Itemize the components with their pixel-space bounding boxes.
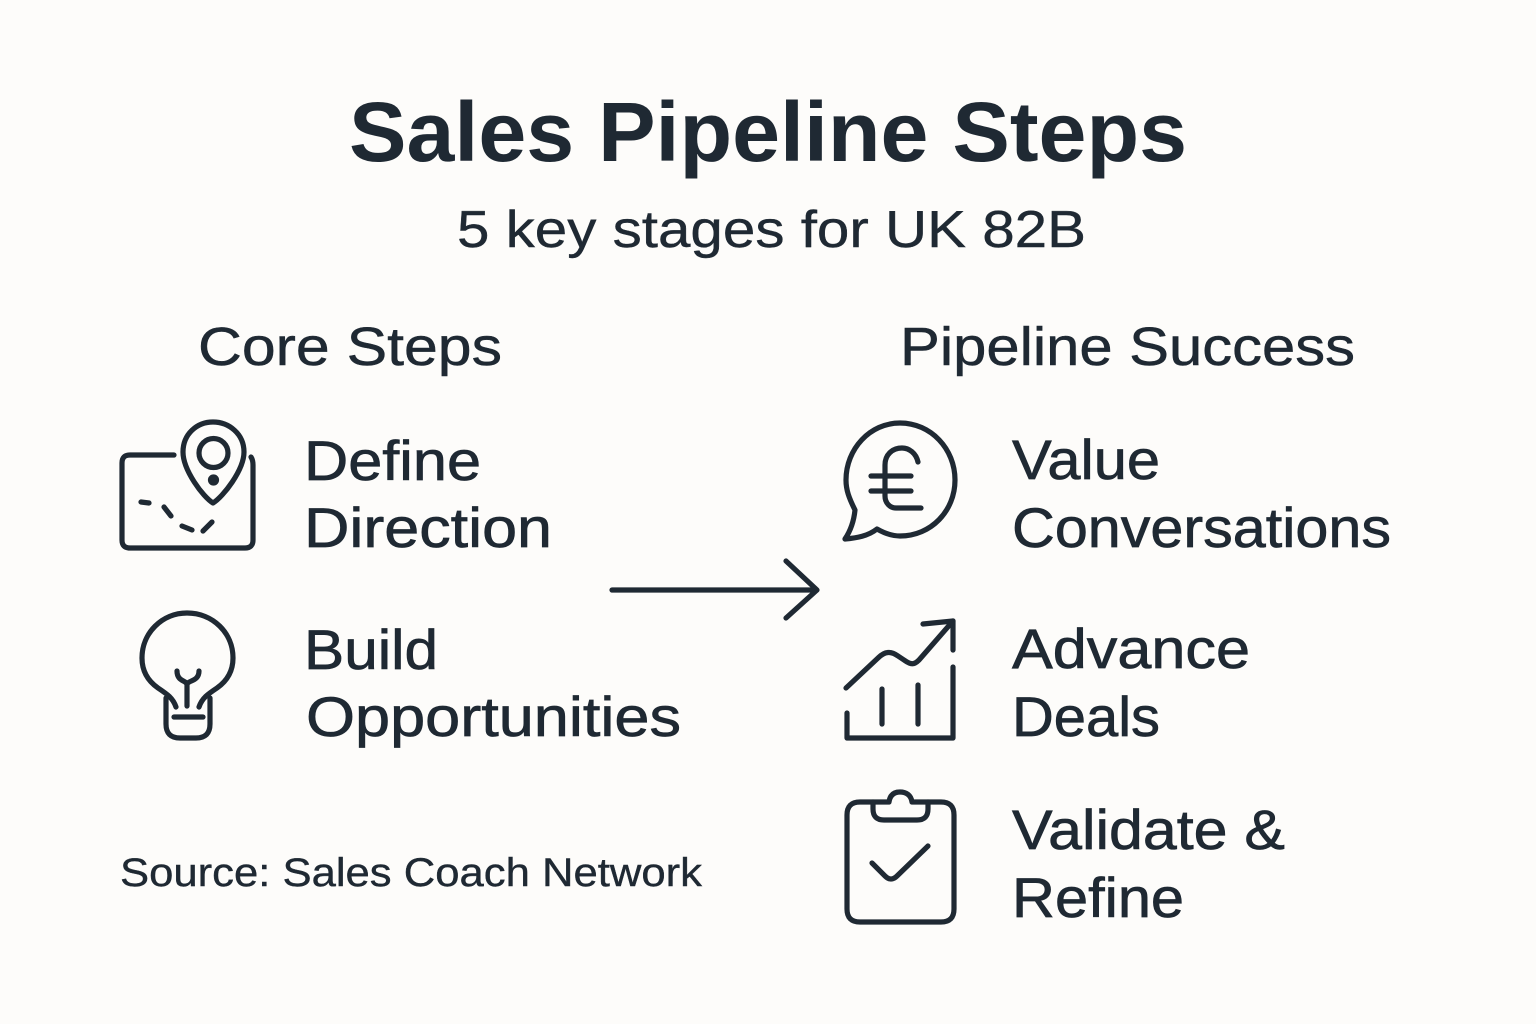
step: validate and refine <box>847 792 1285 929</box>
title: Sales Pipeline Steps <box>349 85 1187 179</box>
heading: core steps: Core Steps <box>198 317 502 377</box>
label: value conversations: Conversations <box>1012 496 1391 559</box>
panel: pipeline success <box>845 317 1391 929</box>
step: advance deals <box>846 617 1250 748</box>
subtitle: 5 key stages for UK 82B <box>457 201 1086 259</box>
source note: Source: Sales Coach Network <box>120 851 703 895</box>
step: build opportunities <box>142 613 681 748</box>
label: build opportunities: Build <box>304 618 438 681</box>
label: advance deals: Deals <box>1012 685 1160 748</box>
icon: clipboard with check <box>847 792 954 922</box>
label: build opportunities: Opportunities <box>306 685 681 748</box>
icon: euro speech bubble <box>845 423 955 539</box>
label: validate and refine: Validate & <box>1012 798 1285 861</box>
arrow <box>612 561 817 618</box>
label: define direction: Define <box>304 429 481 492</box>
label: validate and refine: Refine <box>1012 866 1184 929</box>
step: define direction <box>122 422 552 559</box>
label: define direction: Direction <box>304 496 552 559</box>
icon: light bulb <box>142 613 233 738</box>
icon: rising chart <box>846 621 953 738</box>
step: value conversations <box>845 423 1391 559</box>
panel: core steps <box>122 317 681 748</box>
label: advance deals: Advance <box>1012 617 1250 680</box>
heading: pipeline success: Pipeline Success <box>900 317 1355 377</box>
label: value conversations: Value <box>1012 428 1160 491</box>
icon: map with location pin <box>122 422 253 548</box>
